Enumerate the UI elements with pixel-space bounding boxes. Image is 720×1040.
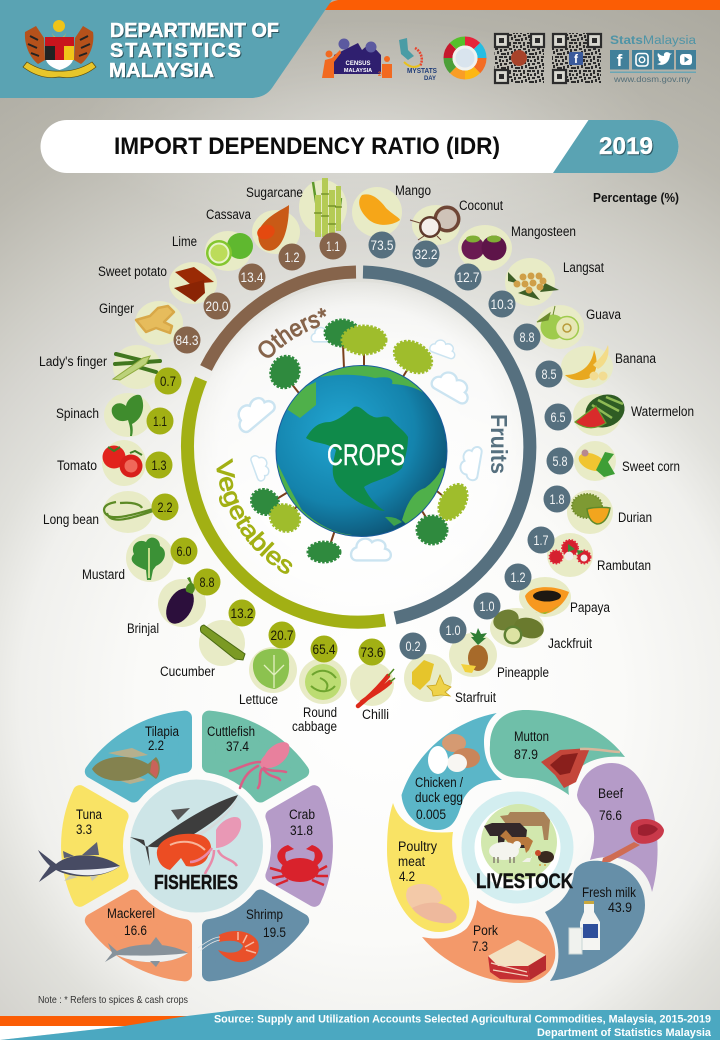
year tab [553, 120, 678, 173]
segment: cuttlefish [188, 707, 308, 808]
item: lime: 13.4 [240, 269, 264, 285]
segment: tuna [68, 792, 122, 900]
label: pork [472, 923, 498, 954]
label: chicken / duck egg: duck egg [415, 790, 463, 805]
item: sugarcane: 1.1 [326, 238, 340, 254]
item: sweet corn [546, 441, 680, 481]
segment: crab [272, 792, 326, 900]
item: coconut [410, 198, 503, 268]
heading: others: Others* [258, 308, 326, 358]
source text: Source: Supply and Utilization Accounts Selected Agricultural Commodities, Malaysia, 2015-2019 [214, 1014, 711, 1026]
item: guava [514, 305, 621, 350]
item: coconut: 32.2 [414, 246, 438, 262]
item: papaya: 1.2 [510, 569, 526, 585]
icon: tuna [38, 842, 120, 882]
label: tilapia [145, 724, 179, 753]
department name: DEPARTMENT OF [110, 20, 279, 42]
segment: tilapia [86, 707, 206, 808]
heading: livestock: LIVESTOCK [476, 870, 573, 893]
icon: pork slab [488, 940, 546, 980]
QR code 1 [494, 33, 544, 83]
label: tuna: 3.3 [76, 822, 92, 837]
heading: fruits: Fruits [486, 414, 512, 474]
item: mango: 73.5 [370, 237, 394, 253]
item: durian [544, 486, 652, 534]
earth [276, 366, 447, 536]
item: jackfruit [474, 592, 592, 651]
logo: census malaysia [322, 38, 392, 78]
item: mustard: Mustard [82, 567, 125, 582]
item: durian: 1.8 [550, 491, 565, 507]
fisheries centre circle [130, 780, 263, 912]
arc: others [206, 272, 356, 368]
label: beef: 76.6 [599, 808, 622, 823]
item: pineapple [440, 616, 549, 680]
item: mangosteen: Mangosteen [511, 224, 576, 239]
label: poultry meat: 4.2 [399, 869, 415, 884]
StatsMalaysia social block [610, 35, 697, 84]
label: crab: Crab [289, 807, 315, 822]
logo: mystats day [399, 38, 437, 82]
item: mangosteen: 12.7 [456, 269, 480, 285]
item: spinach: Spinach [56, 406, 99, 421]
department name [109, 20, 279, 82]
item: jackfruit: Jackfruit [548, 636, 592, 651]
label: mutton: Mutton [514, 729, 549, 744]
item: lady's finger: Lady's finger [39, 354, 107, 369]
item: cucumber: 13.2 [230, 605, 254, 621]
item: rambutan [528, 526, 651, 577]
item: ginger: Ginger [99, 301, 134, 316]
item: sweet potato: 20.0 [206, 298, 229, 314]
item: guava: 8.8 [520, 329, 535, 345]
item: round cabbage [292, 636, 347, 734]
item: banana: Banana [615, 351, 656, 366]
item: watermelon [544, 389, 694, 436]
department name: STATISTICS [110, 40, 241, 62]
label: mackerel [107, 906, 155, 938]
item: watermelon: Watermelon [631, 404, 694, 419]
label: poultry meat: meat [398, 854, 425, 869]
title text: IMPORT DEPENDENCY RATIO (IDR) [114, 133, 500, 160]
title pill [40, 120, 678, 173]
label: poultry meat [398, 839, 437, 884]
label: cuttlefish: 37.4 [226, 739, 249, 754]
icon: mackerel [105, 937, 188, 967]
logo: mystats day: MYSTATS [407, 68, 437, 75]
icon: milk bottle and glass [569, 901, 600, 954]
item: lady's finger: 0.7 [160, 373, 176, 389]
label: tilapia: Tilapia [145, 724, 179, 739]
icon: crab [270, 845, 328, 885]
StatsMalaysia social block: f [617, 51, 623, 70]
item: spinach [56, 393, 174, 437]
item: sweet corn: Sweet corn [622, 459, 680, 474]
item: banana [536, 345, 656, 388]
petal: poultry meat [387, 803, 469, 932]
petal: fresh milk [545, 861, 645, 981]
item: papaya [504, 564, 610, 617]
item: lettuce: 20.7 [270, 627, 294, 643]
item: lime [172, 231, 266, 290]
item: rambutan: 1.7 [534, 532, 549, 548]
item: cassava [206, 205, 306, 270]
item: long bean: Long bean [43, 512, 99, 527]
item: sugarcane [246, 178, 347, 260]
item: ginger [99, 301, 200, 354]
item: long bean: 2.2 [158, 499, 173, 515]
item: sweet corn: 5.8 [552, 453, 568, 469]
item: starfruit: Starfruit [455, 690, 496, 705]
item: jackfruit: 1.0 [480, 598, 495, 614]
item: watermelon: 6.5 [550, 409, 566, 425]
label: crab [289, 807, 315, 838]
clouds [231, 328, 482, 560]
item: mango: Mango [395, 183, 431, 198]
logo: census malaysia: CENSUS [345, 61, 371, 67]
label: poultry meat: Poultry [398, 839, 437, 854]
icon: lamb rack [541, 748, 620, 788]
item: mustard [82, 534, 198, 582]
item: langsat: Langsat [563, 260, 604, 275]
teal header panel [0, 0, 332, 98]
petal: beef [577, 763, 658, 892]
label: pork: Pork [473, 923, 498, 938]
item: banana: 8.5 [542, 366, 557, 382]
item: long bean [43, 491, 178, 533]
petal: mutton [490, 710, 625, 795]
item: ginger: 84.3 [176, 332, 199, 348]
item: cucumber [160, 600, 256, 679]
item: durian: Durian [618, 510, 652, 525]
label: mackerel: 16.6 [124, 923, 147, 938]
note: Note : * Refers to spices & cash crops [38, 994, 188, 1006]
icon: tilapia fish [92, 748, 160, 784]
item: brinjal: 8.8 [200, 574, 215, 590]
arc: vegetables [188, 379, 385, 622]
footer band: Department of Statistics Malaysia [537, 1027, 712, 1039]
label: shrimp: Shrimp [246, 907, 283, 922]
label: chicken / duck egg: Chicken / [415, 775, 463, 790]
arc: fruits [363, 272, 530, 618]
item: cassava: Cassava [206, 207, 251, 222]
item: papaya: Papaya [570, 600, 610, 615]
percentage unit label: Percentage (%) [593, 190, 679, 205]
label: beef [598, 786, 623, 823]
item: brinjal [127, 568, 220, 636]
label: shrimp: 19.5 [263, 925, 286, 940]
item: pineapple: 1.0 [446, 622, 461, 638]
label: mutton [514, 729, 549, 762]
petal: pork [422, 900, 555, 983]
item: pineapple: Pineapple [497, 665, 549, 680]
item: mango [352, 183, 431, 258]
item: tomato: Tomato [57, 458, 97, 473]
icon: eggs [428, 734, 480, 774]
orange top bar [322, 0, 720, 10]
item: mustard: 6.0 [176, 543, 192, 559]
StatsMalaysia social block: www.dosm.gov.my [613, 74, 692, 84]
continent [306, 406, 408, 511]
year: 2019 [599, 133, 653, 160]
item: chilli: 73.6 [360, 644, 384, 660]
item: langsat [488, 258, 604, 318]
label: pork: 7.3 [472, 939, 488, 954]
petal: chicken / duck egg [402, 713, 502, 830]
icon: farm animals [484, 812, 554, 866]
StatsMalaysia social block: Stats Malaysia [610, 35, 697, 47]
item: chilli [350, 638, 395, 722]
item: lime: Lime [172, 234, 197, 249]
segment: mackerel [86, 884, 206, 985]
item: rambutan: Rambutan [597, 558, 651, 573]
livestock centre [462, 792, 574, 904]
item: sweet potato [98, 262, 230, 320]
item: tomato: 1.3 [152, 457, 167, 473]
label: crab: 31.8 [290, 823, 313, 838]
department name: MALAYSIA [109, 60, 214, 82]
livestock wheel [387, 710, 664, 983]
globe label: CROPS [327, 439, 405, 472]
label: cuttlefish [207, 724, 255, 754]
icon: cuttlefish [230, 742, 289, 788]
icon: beef leg [602, 819, 664, 862]
label: fresh milk [582, 885, 636, 915]
item: sweet potato: Sweet potato [98, 264, 167, 279]
item: spinach: 1.1 [153, 413, 167, 429]
icon: salmon, shrimp and squid group [130, 795, 241, 874]
globe illustration [231, 320, 482, 562]
item: round cabbage: cabbage [292, 719, 337, 734]
logo: census malaysia: MALAYSIA [344, 68, 372, 74]
item: lettuce: Lettuce [239, 692, 278, 707]
label: cuttlefish: Cuttlefish [207, 724, 255, 739]
item: cassava: 1.2 [284, 249, 300, 265]
item: cucumber: Cucumber [160, 664, 215, 679]
icon: coat of arms [23, 20, 96, 78]
icon: poultry meat [406, 884, 457, 923]
label: fresh milk: Fresh milk [582, 885, 636, 900]
icon: shrimp [198, 931, 259, 962]
logo: census malaysia: 2020 [378, 72, 392, 78]
label: tuna: Tuna [76, 807, 102, 822]
item: round cabbage: 65.4 [312, 641, 336, 657]
crops ring [188, 272, 530, 622]
item: brinjal: Brinjal [127, 621, 159, 636]
item: coconut: Coconut [459, 198, 503, 213]
label: shrimp [246, 907, 286, 940]
item: round cabbage: Round [303, 705, 337, 720]
item: starfruit [400, 632, 496, 705]
item: lady's finger [39, 345, 182, 394]
logo: mystats day: DAY [424, 75, 437, 82]
ring headings [172, 264, 552, 622]
label: tuna [76, 807, 102, 837]
label: tilapia: 2.2 [148, 738, 164, 753]
item: guava: Guava [586, 307, 621, 322]
logo: sustainable development goals wheel [448, 41, 482, 75]
item: chilli: Chilli [362, 707, 389, 722]
label: fresh milk: 43.9 [608, 900, 632, 915]
QR code 2 [552, 33, 601, 83]
item: starfruit: 0.2 [406, 638, 421, 654]
segment: shrimp [188, 884, 308, 985]
heading: fisheries: FISHERIES [154, 872, 238, 894]
footer band [0, 1010, 720, 1040]
label: mutton: 87.9 [514, 747, 538, 762]
fisheries wheel [38, 707, 328, 985]
label: beef: Beef [598, 786, 623, 801]
item: mangosteen [454, 224, 576, 290]
heading: vegetables: Vegetables [216, 458, 292, 574]
header band [0, 0, 720, 98]
item: sugarcane: Sugarcane [246, 185, 303, 200]
QR code 2: f [574, 52, 579, 66]
item: langsat: 10.3 [490, 296, 514, 312]
label: chicken / duck egg [415, 775, 463, 822]
label: mackerel: Mackerel [107, 906, 155, 921]
trees [275, 345, 448, 548]
item: tomato [57, 440, 172, 486]
label: chicken / duck egg: 0.005 [416, 807, 446, 822]
item: lettuce [239, 622, 297, 707]
